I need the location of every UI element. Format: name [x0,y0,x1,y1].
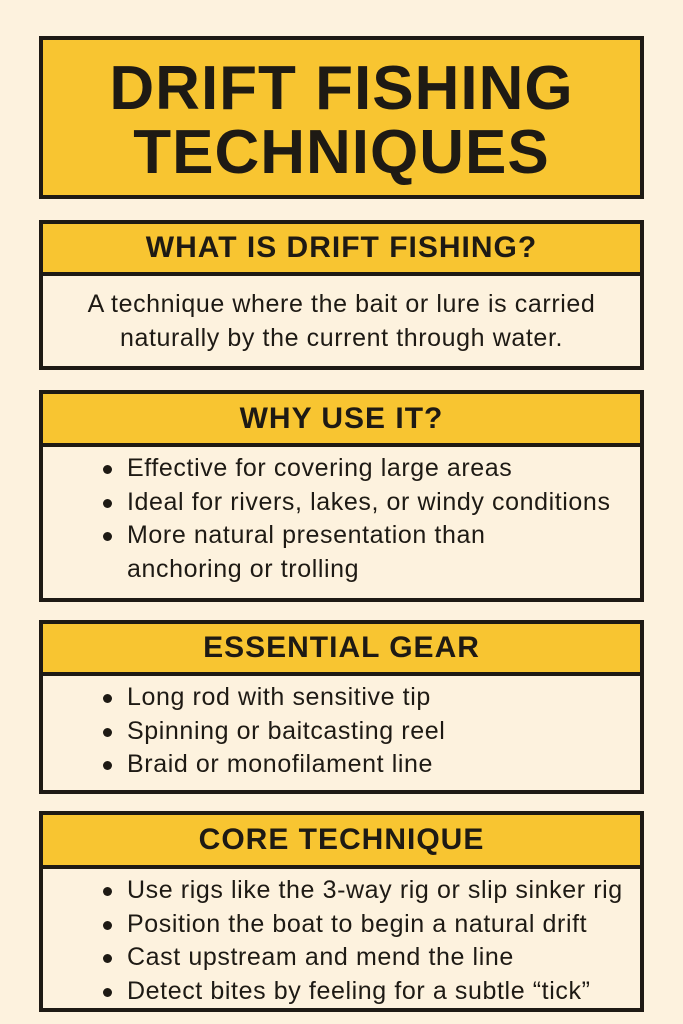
list: gear: Braid or monofilament line [127,750,433,778]
list: steps: Use rigs like the 3-way rig or slip sinker rig [127,876,623,904]
panel: why use it [39,390,644,602]
list: steps: Cast upstream and mend the line [127,943,514,971]
text: definition: A technique where the bait or lure is carried [88,290,595,318]
panel: what is drift fishing [39,220,644,370]
heading: core [43,815,640,869]
panel: core technique [39,811,644,1012]
list: steps [103,876,623,1004]
list: gear [103,683,445,778]
title [39,36,644,199]
list: reasons: anchoring or trolling [127,554,359,582]
text: definition: naturally by the current through water. [120,324,563,352]
list: reasons: More natural presentation than [127,521,486,549]
title: TECHNIQUES [133,118,550,186]
list: gear: Long rod with sensitive tip [127,683,431,711]
list: gear: Spinning or baitcasting reel [127,716,445,744]
list: reasons: Ideal for rivers, lakes, or windy conditions [127,488,611,516]
heading: gear [43,624,640,676]
title: DRIFT FISHING [109,54,574,122]
panel: essential gear [39,620,644,794]
heading: why: WHY USE IT? [240,402,443,434]
list: steps: Position the boat to begin a natural drift [127,910,587,938]
heading: what is: WHAT IS DRIFT FISHING? [146,231,537,264]
text: definition [88,290,595,352]
heading: gear: ESSENTIAL GEAR [203,631,480,664]
heading: why [43,394,640,447]
list: reasons: Effective for covering large areas [127,454,512,482]
list: reasons [103,454,611,582]
heading: core: CORE TECHNIQUE [199,823,484,856]
heading: what is [43,224,640,276]
list: steps: Detect bites by feeling for a subtle “tick” [127,976,590,1004]
